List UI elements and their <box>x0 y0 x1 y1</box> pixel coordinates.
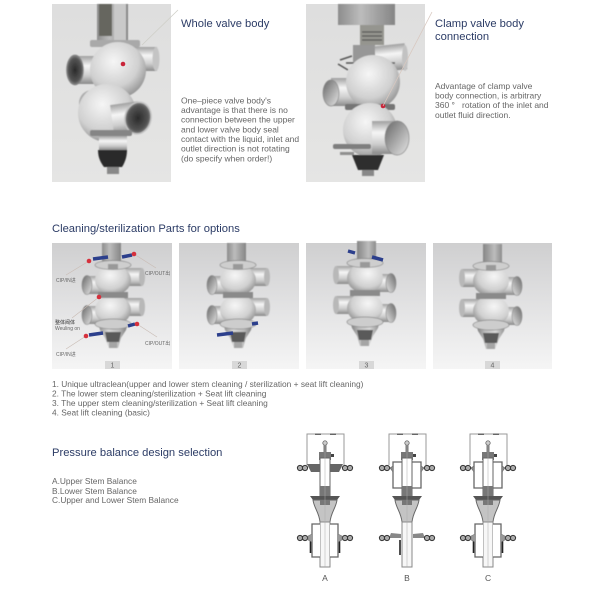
icon: valve option 2 <box>207 243 270 348</box>
text block: clamp valve body advantage: outlet fluid direction. <box>435 110 511 120</box>
text block: clamp valve body advantage <box>435 81 549 120</box>
text block: clamp valve body advantage: 360 ° rotation of the inlet and <box>435 100 549 110</box>
text block: cleaning option list: 4. Seat lift cleaning (basic) <box>52 408 150 418</box>
heading: cleaning parts: Cleaning/sterilization Parts for options <box>52 223 240 235</box>
icon: blue cleaning handles <box>89 255 135 335</box>
heading: whole valve body: Whole valve body <box>181 18 270 30</box>
diagram: A upper stem balance: A <box>322 573 328 583</box>
text block: whole valve body advantage: (do specify when order!) <box>181 153 272 163</box>
heading: clamp valve body connection <box>435 18 524 43</box>
heading: clamp valve body connection: Clamp valve body <box>435 18 524 30</box>
panel: whole valve body photo <box>52 4 171 182</box>
number tag 4: 4 <box>491 362 495 370</box>
annotations: 整体阀体 <box>55 319 75 326</box>
text block: whole valve body advantage: contact with the liquid, inlet and <box>181 134 299 144</box>
annotations: Weuling on <box>55 326 80 332</box>
text block: whole valve body advantage: advantage is that there is no <box>181 105 288 115</box>
heading: pressure balance: Pressure balance design selection <box>52 447 222 459</box>
number tag 3: 3 <box>365 362 369 370</box>
annotation leaders <box>66 254 157 349</box>
annotations: CIP/OUT出 <box>145 340 170 347</box>
leader line: clamp valve body <box>383 12 432 106</box>
number tag 1: 1 <box>111 362 115 370</box>
icon: valve option 3 <box>333 241 396 346</box>
icon: valve option 4 <box>459 244 522 349</box>
panel: option 1 <box>52 243 172 370</box>
text block: cleaning option list: 2. The lower stem cleaning/sterilization + Seat lift cleaning <box>52 388 267 398</box>
annotations <box>55 270 170 358</box>
icon: clamp valve body <box>323 4 409 176</box>
icon: blue cleaning handles <box>348 251 383 260</box>
annotations: CIP/IN进 <box>56 277 76 284</box>
diagram: C upper and lower stem balance: C <box>485 573 491 583</box>
text block: whole valve body advantage: One–piece valve body's <box>181 96 271 106</box>
heading: clamp valve body connection: connection <box>435 31 489 43</box>
text block: balance options: C.Upper and Lower Stem Balance <box>52 495 179 505</box>
text block: balance options <box>52 476 179 505</box>
text block: cleaning option list: 1. Unique ultraclean(upper and lower stem cleaning / sterilization + seat lift cleaning) <box>52 379 364 389</box>
text block: balance options: B.Lower Stem Balance <box>52 486 137 496</box>
icon: red marker dot <box>381 104 385 108</box>
diagram: A upper stem balance <box>297 434 353 583</box>
annotations: CIP/IN进 <box>56 351 76 358</box>
icon: red marker dot <box>121 62 125 66</box>
panel: option 2 <box>179 243 299 370</box>
text block: whole valve body advantage: outlet direction is not rotating <box>181 144 290 154</box>
panel: clamp valve body photo <box>306 4 425 182</box>
text block: whole valve body advantage: connection between the upper <box>181 115 295 125</box>
text block: whole valve body advantage: and lower valve body seal <box>181 124 279 134</box>
panel: option 3 <box>306 241 426 370</box>
text block: clamp valve body advantage: Advantage of clamp valve <box>435 81 533 91</box>
icon: red dots <box>84 252 139 338</box>
text block: cleaning option list: 3. The upper stem cleaning/sterilization + Seat lift cleaning <box>52 398 268 408</box>
text block: clamp valve body advantage: body connection, is arbitrary <box>435 90 542 100</box>
text block: whole valve body advantage <box>181 96 299 163</box>
panel: option 4 <box>433 243 552 370</box>
text block: balance options: A.Upper Stem Balance <box>52 476 137 486</box>
icon: valve option 1 <box>82 243 145 348</box>
number tag 2: 2 <box>238 362 242 370</box>
icon: blue cleaning handles <box>217 323 258 335</box>
leader line: whole valve body <box>142 10 178 45</box>
icon: whole valve body <box>66 4 160 174</box>
annotations: CIP/OUT出 <box>145 270 170 277</box>
text block: cleaning option list <box>52 379 364 418</box>
diagram: C upper and lower stem balance <box>460 434 516 583</box>
diagram: B lower stem balance: B <box>404 573 410 583</box>
diagram: B lower stem balance <box>379 434 435 583</box>
